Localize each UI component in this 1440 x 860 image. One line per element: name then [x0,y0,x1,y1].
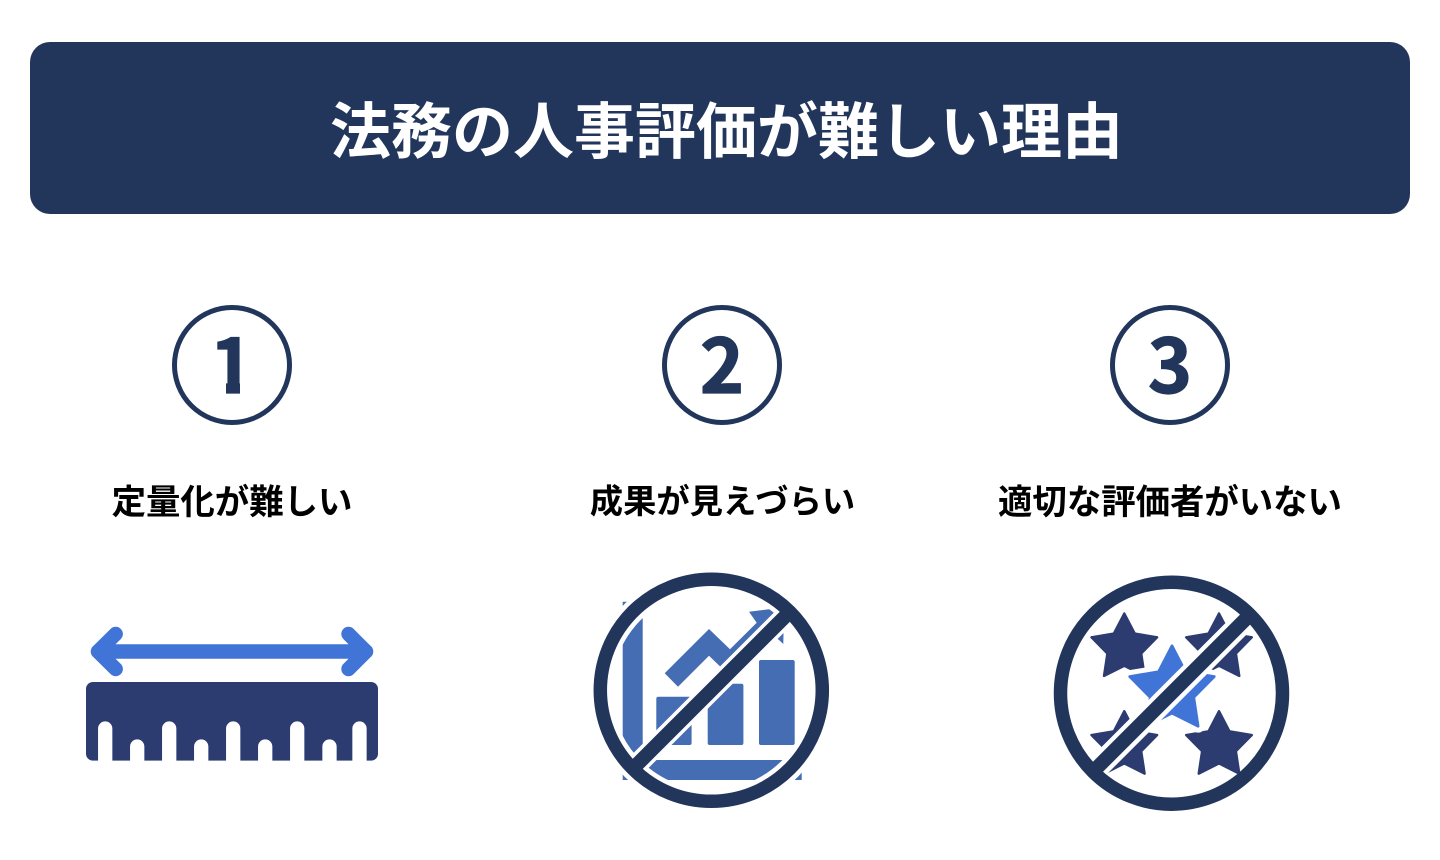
label 3: 適切な評価者がいない [998,484,1342,522]
prohibition ring [600,579,822,801]
prohibition slash [633,612,790,769]
ruler [80,682,384,777]
number 1 [172,305,292,425]
trend arrow [665,607,784,687]
title: 法務の人事評価が難しい理由 [330,98,1123,166]
icon: ruler with double-headed arrow [80,634,384,777]
slash gap [632,611,790,770]
number 1: 1 [210,306,254,415]
prohibition slash [1093,615,1250,772]
title banner [30,42,1410,214]
label 1: 定量化が難しい [112,484,352,522]
number 2: 2 [700,306,744,415]
dark stars [1091,614,1252,774]
chart axes [623,602,802,780]
label 2: 成果が見えづらい [590,484,855,521]
number 2 [662,305,782,425]
double-headed arrow [98,634,366,669]
icon: prohibited stars [1060,582,1282,804]
centre star [1130,646,1214,726]
icon: prohibited growth chart [600,579,822,801]
chart bars [656,660,795,745]
slash gap [1092,614,1250,773]
prohibition ring [1060,582,1282,804]
number 3 [1110,305,1230,425]
ring halo [600,579,822,801]
number 3: 3 [1148,306,1192,415]
